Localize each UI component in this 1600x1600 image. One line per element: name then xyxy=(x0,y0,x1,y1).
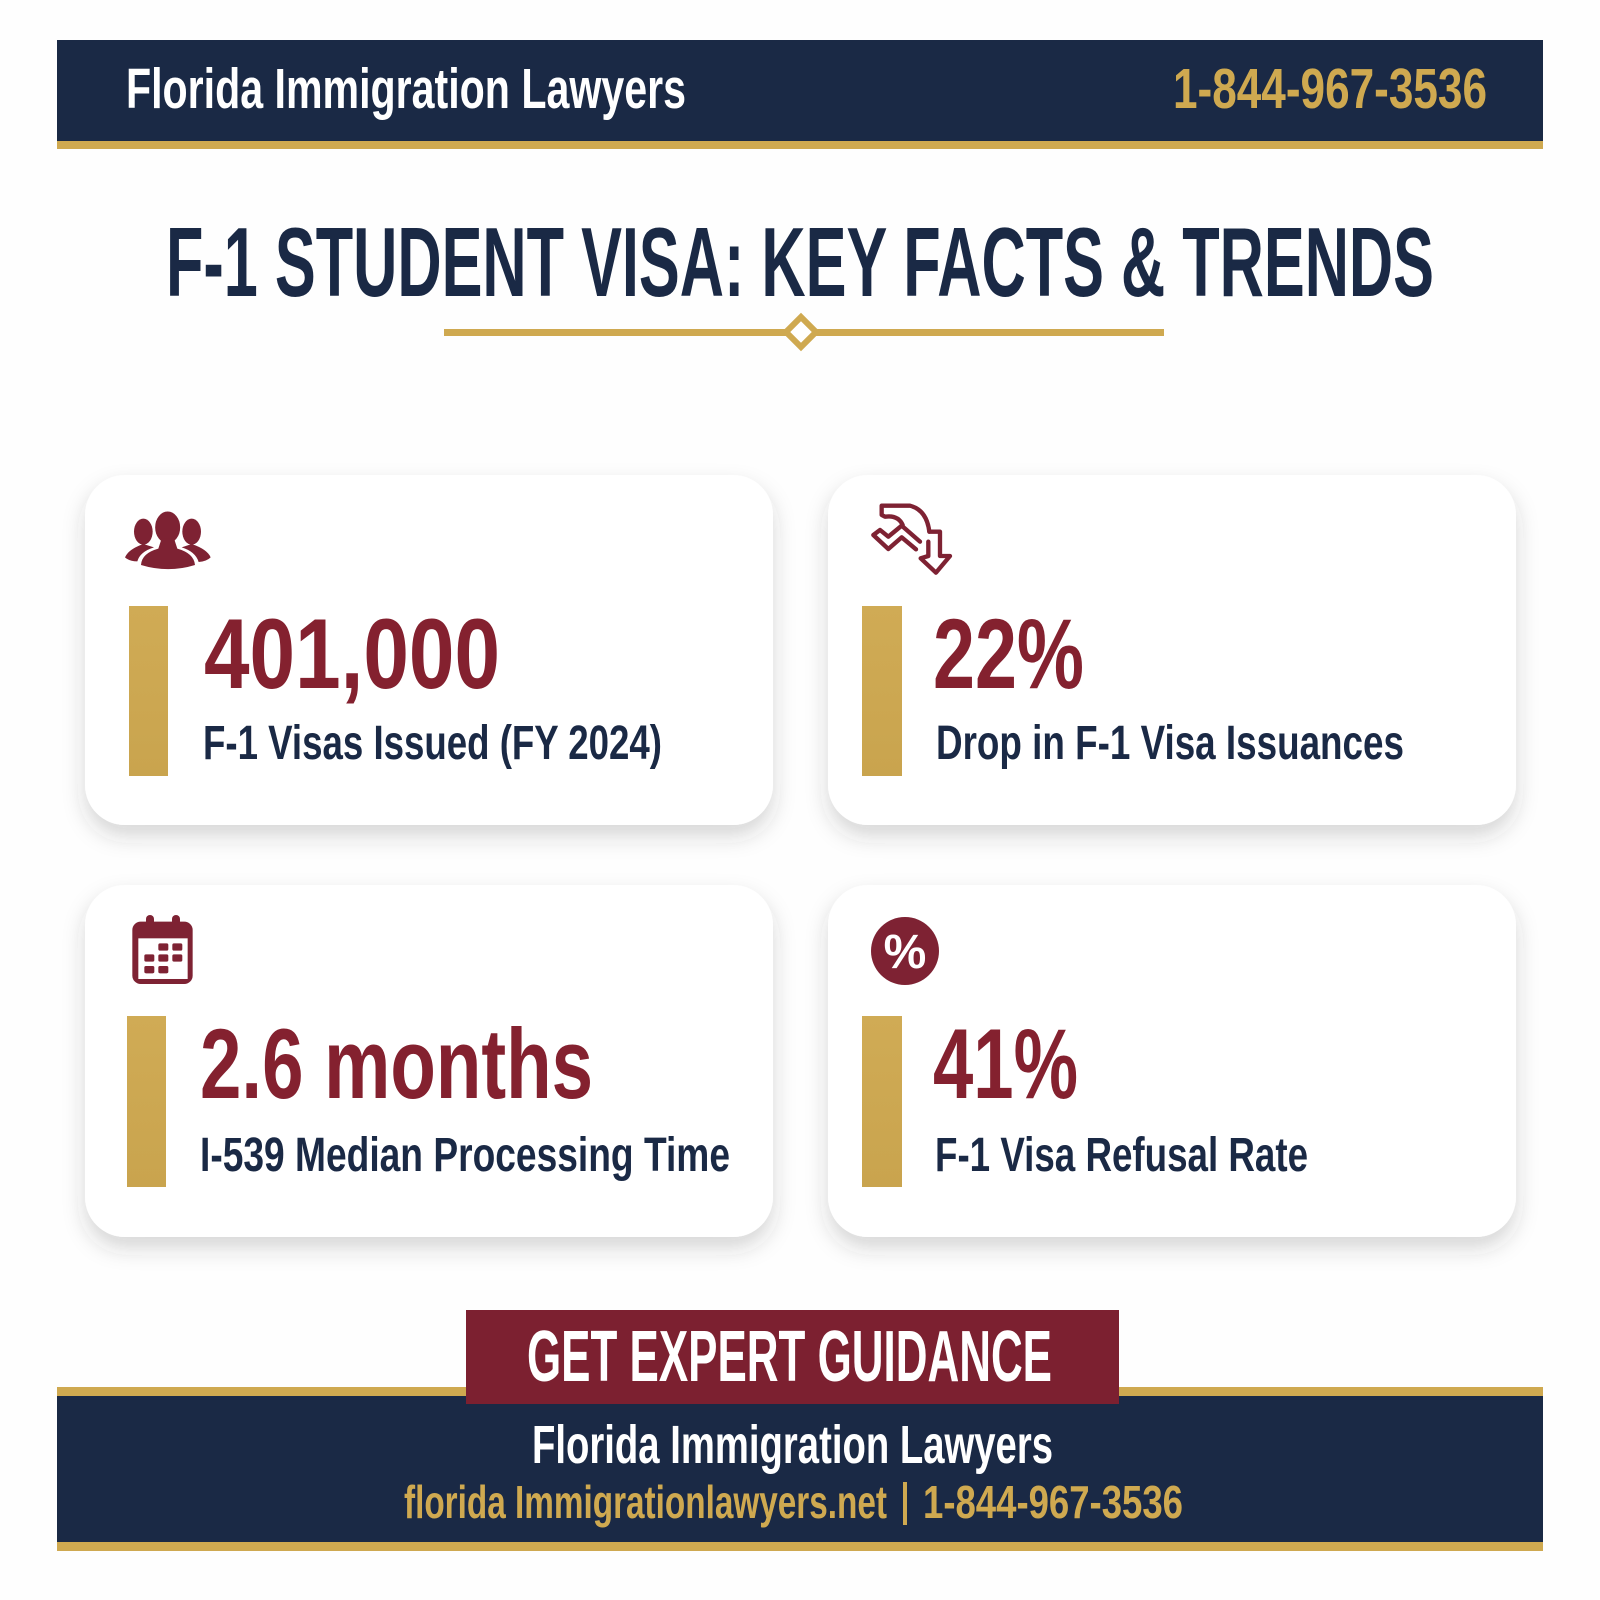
stat value: 22% xyxy=(933,598,1084,709)
icon: calendar xyxy=(132,915,193,984)
panel: drop in issuances xyxy=(828,475,1516,825)
stat value: 401,000 xyxy=(204,598,500,709)
gold accent bar xyxy=(127,1016,166,1187)
gold accent bar xyxy=(862,1016,902,1187)
stat label: F-1 Visas Issued (FY 2024) xyxy=(203,717,662,770)
gold accent bar xyxy=(129,606,168,776)
stat value: 2.6 months xyxy=(200,1008,593,1119)
panel: refusal rate xyxy=(828,885,1516,1237)
top header bar xyxy=(57,40,1543,149)
footer website: florida Immigrationlawyers.net xyxy=(404,1476,887,1528)
stat value: 41% xyxy=(933,1008,1078,1119)
panel: processing time xyxy=(85,885,773,1237)
call to action banner xyxy=(466,1310,1119,1404)
icon: percent badge xyxy=(871,917,939,985)
header phone number: 1-844-967-3536 xyxy=(1173,57,1487,121)
icon: people group xyxy=(125,511,211,569)
title underline with diamond xyxy=(444,317,1164,347)
call to action banner: GET EXPERT GUIDANCE xyxy=(527,1317,1052,1397)
stat label: F-1 Visa Refusal Rate xyxy=(935,1129,1308,1182)
gold accent bar xyxy=(862,606,902,776)
stat label: I-539 Median Processing Time xyxy=(200,1129,730,1182)
footer separator xyxy=(903,1482,907,1525)
icon: downward trend arrow xyxy=(873,506,950,573)
header firm name: Florida Immigration Lawyers xyxy=(126,57,686,121)
footer phone number: 1-844-967-3536 xyxy=(923,1476,1183,1528)
footer band xyxy=(57,1387,1543,1551)
icon: percent badge: % xyxy=(884,926,926,979)
stat label: Drop in F-1 Visa Issuances xyxy=(936,717,1404,770)
footer firm name: Florida Immigration Lawyers xyxy=(532,1415,1053,1475)
panel: visas issued xyxy=(85,475,773,825)
